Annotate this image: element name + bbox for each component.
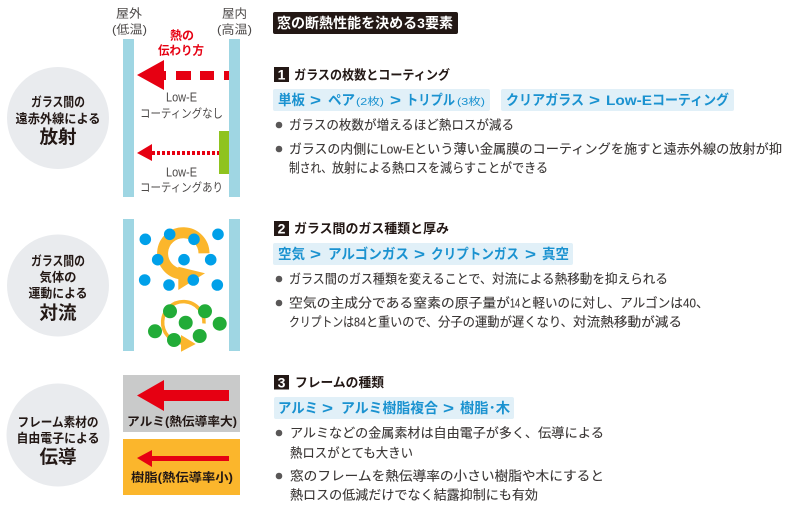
bullet text: gas types: 対流による熱移動を抑えられる [492, 272, 668, 286]
ranking: coating: > [589, 92, 600, 110]
green gas molecules [148, 304, 227, 347]
bullet text: Low-E: ガラスの内側に [289, 142, 379, 156]
resin frame sample [123, 439, 240, 495]
circle: radiation label: ガラス間の [31, 94, 85, 110]
bullet text: atomic weight: 14 [510, 296, 520, 310]
ranking: coating: コーティング [652, 92, 729, 108]
bullet text: atomic weight: 分子の運動が遅くなり、 [438, 314, 573, 330]
bullet text: atomic weight: 空気の主成分である窒素の原子量が [289, 296, 510, 310]
bullet text: atomic weight: アルゴンは [620, 296, 683, 310]
bullet text: aluminium: 伝導による [538, 426, 604, 440]
ranking: gas types: 真空 [542, 246, 569, 262]
circle: convection label: 気体の [40, 270, 76, 284]
ranking: frame materials: > [322, 400, 333, 418]
circle: conduction label: 自由電子による [16, 430, 100, 446]
ranking: frame materials: 樹脂･木 [460, 400, 510, 416]
glass panes [123, 39, 240, 197]
panel: radiation diagram [7, 6, 252, 197]
bullet text: atomic weight: 対流熱移動が減る [573, 314, 682, 330]
bullet text: aluminium: アルミなどの金属素材は自由電子が多く、 [290, 426, 538, 440]
ranking: coating: クリアガラス [506, 92, 584, 108]
ranking: number of panes: 単板 [278, 92, 305, 108]
circle: convection label: 運動による [28, 286, 88, 300]
resin frame sample: 樹脂(熱伝導率小) [131, 470, 233, 484]
ranking: number of panes: トリプル [406, 92, 455, 108]
ranking: number of panes [273, 89, 490, 111]
label: outdoor low temperature: (低温) [112, 22, 147, 36]
label: heat transfer direction: 熱の [170, 28, 194, 42]
aluminium frame sample [123, 375, 240, 432]
glass panes [123, 219, 240, 351]
bullet text: atomic weight: 84 [354, 314, 366, 330]
bullet text: Low-E: Low-E [380, 142, 414, 156]
bullet text: resin or wood: 熱ロスの低減だけでなく結露抑制にも有効 [290, 488, 538, 502]
circle: conduction label [6, 384, 110, 486]
aluminium frame sample: アルミ(熱伝導率大) [127, 414, 237, 428]
panel: factor 3 frame type [274, 374, 604, 502]
label: with Low-E coating: コーティングあり [140, 180, 223, 194]
label: without Low-E coating: Low-E [166, 90, 197, 104]
label: heat transfer direction [158, 28, 204, 58]
ranking: frame materials [274, 397, 514, 419]
bullet text: gas types: ガラス間のガス種類を変えることで、 [289, 272, 492, 286]
bullet text: atomic weight: 40 [683, 296, 696, 310]
heading: factor 1: ガラスの枚数とコーティング [294, 68, 450, 82]
ranking: gas types: アルゴンガス [328, 246, 409, 262]
blue gas molecules [139, 228, 224, 291]
ranking: coating [501, 89, 734, 111]
bullet text: Low-E: という薄い金属膜のコーティングを施すと遠赤外線の放射が抑 [414, 142, 782, 156]
circle: conduction label: 伝導 [40, 446, 76, 468]
arrow: strong radiation without Low-E [137, 60, 229, 90]
label: without Low-E coating [140, 90, 223, 120]
circle: convection label: ガラス間の [31, 254, 85, 268]
ranking: frame materials: アルミ [278, 400, 318, 416]
label: with Low-E coating: Low-E [166, 166, 197, 180]
heading: factor 3: フレームの種類 [295, 375, 384, 390]
ranking: frame materials: アルミ樹脂複合 [341, 400, 438, 416]
arrow: small convection swirl [163, 302, 204, 352]
bullet text: gas types [276, 272, 668, 286]
bullet text: panes: ガラスの枚数が増えるほど熱ロスが減る [289, 118, 514, 132]
heading: factor 3: 3 [278, 374, 286, 390]
ranking: gas types: > [525, 246, 536, 264]
ranking: gas types: クリプトンガス [431, 246, 519, 262]
bullet text: aluminium: 熱ロスがとても大きい [290, 446, 413, 460]
panel: factor 1 glass and coating [273, 66, 782, 176]
panel: conduction diagram [6, 375, 240, 495]
circle: conduction label: フレーム素材の [18, 414, 98, 430]
bullet text: Low-E: 制され、 [289, 160, 332, 176]
ranking: frame materials: > [443, 400, 454, 418]
bullet text: resin or wood: 窓のフレームを熱伝導率の小さい樹脂や木にすると [290, 468, 604, 484]
bullet text: atomic weight: と軽いのに対し、 [520, 296, 620, 310]
circle: convection label [7, 234, 109, 336]
arrow: weak radiation with Low-E [137, 144, 219, 161]
panel: factor 2 gas and thickness [273, 220, 709, 330]
label: indoor high temperature: 屋内 [222, 6, 247, 20]
Low-E coating layer [219, 131, 229, 174]
label: without Low-E coating: コーティングなし [140, 106, 223, 120]
label: outdoor low temperature: 屋外 [116, 6, 142, 20]
ranking: number of panes: > [310, 92, 321, 110]
panel: convection diagram [7, 219, 240, 352]
bullet text: Low-E: 放射による熱ロスを減らすことができる [332, 160, 548, 176]
bullet text: atomic weight: 、 [696, 296, 709, 310]
label: outdoor low temperature [112, 6, 147, 36]
ranking: number of panes: > [390, 92, 401, 110]
ranking: number of panes: ペア [328, 92, 355, 108]
circle: convection label: 対流 [40, 302, 77, 324]
ranking: gas types: > [310, 246, 321, 264]
title [273, 12, 458, 34]
heading: factor 2: ガラス間のガス種類と厚み [294, 221, 449, 236]
title: 窓の断熱性能を決める3要素 [277, 15, 453, 31]
ranking: gas types: 空気 [278, 246, 305, 262]
circle: radiation label [7, 67, 109, 169]
heading: factor 2: 2 [278, 220, 286, 236]
bullet text: Low-E [276, 142, 782, 176]
bullet text: atomic weight: と重いので、 [366, 314, 438, 330]
ranking: gas types [273, 243, 573, 265]
label: heat transfer direction: 伝わり方 [158, 42, 204, 58]
ranking: coating: Low-E [606, 92, 652, 108]
ranking: number of panes: (3枚) [457, 95, 485, 108]
ranking: number of panes: (2枚) [356, 95, 384, 108]
bullet text: aluminium [276, 426, 604, 460]
circle: radiation label: 遠赤外線による [16, 111, 100, 126]
circle: radiation label: 放射 [40, 126, 76, 148]
bullet text: atomic weight: クリプトンは [289, 314, 354, 330]
arrow: large convection swirl [163, 233, 205, 290]
label: indoor high temperature: (高温) [217, 22, 252, 36]
heading: factor 1: 1 [278, 66, 286, 82]
ranking: gas types: > [414, 246, 425, 264]
bullet text: atomic weight [276, 296, 709, 330]
label: indoor high temperature [217, 6, 252, 36]
label: with Low-E coating [140, 166, 223, 194]
bullet text: resin or wood [276, 468, 604, 502]
